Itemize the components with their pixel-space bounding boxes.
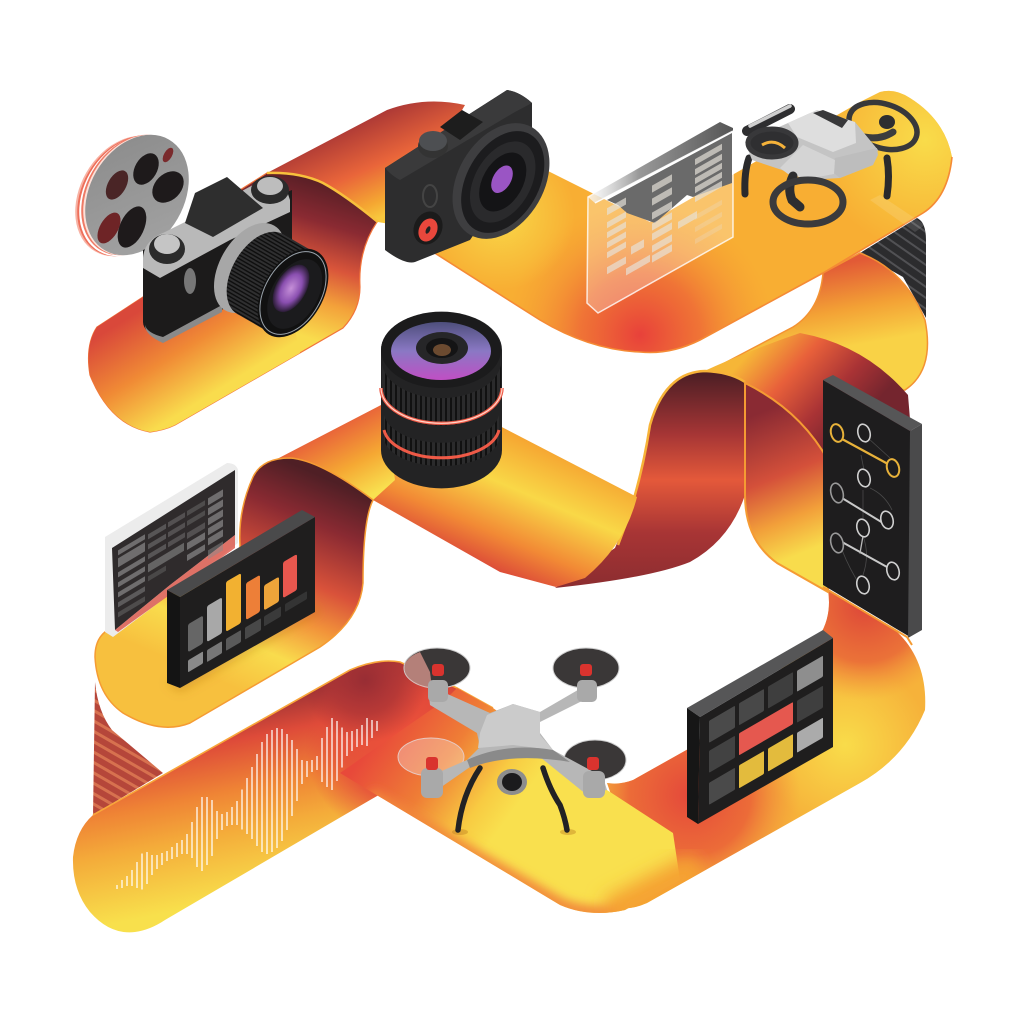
- icon: small folding drone: [745, 94, 925, 232]
- panel: dark data table: [105, 463, 238, 637]
- chart bars: [188, 534, 307, 673]
- ribbon: long band top edge: [93, 661, 493, 815]
- compact body: [385, 90, 532, 262]
- ribbon: front band under drone: [340, 688, 680, 913]
- glass top edge: [588, 122, 733, 203]
- ribbon: rounded tail end: [89, 260, 300, 432]
- film coil behind right loop: [860, 218, 926, 318]
- drone camera: [497, 769, 527, 795]
- grid side: [687, 708, 700, 824]
- ribbon: back band of fold: [700, 333, 915, 480]
- lens glass: [391, 322, 491, 380]
- panel: glass data chart: [587, 122, 733, 313]
- ribbon: blended seam at the lower bend: [610, 868, 700, 915]
- lens upper ribs: [382, 365, 501, 425]
- ribbon: main top band lower edge: [430, 157, 952, 352]
- lens red ring upper: [381, 388, 502, 423]
- lens inner core: [426, 338, 458, 358]
- icon: film reel: [54, 116, 210, 275]
- ribbon: fold edge: [618, 371, 745, 545]
- grid top: [687, 630, 833, 717]
- drone body underside: [467, 748, 570, 768]
- grid front: [698, 638, 833, 824]
- camera body: [143, 190, 292, 341]
- drone legs: [745, 158, 888, 196]
- lens red ring highlight: [381, 388, 502, 423]
- camera lens: [199, 211, 343, 350]
- rotor disc front right: [564, 740, 626, 780]
- dial knob: [149, 234, 185, 264]
- rear right rotor: [843, 94, 923, 158]
- camera prism: [185, 177, 263, 237]
- motors: [421, 680, 605, 798]
- rotor caps: [426, 664, 599, 770]
- board nodes: [829, 423, 901, 595]
- table red glow: [115, 535, 235, 632]
- camera top plate: [143, 180, 290, 278]
- slab side: [167, 590, 180, 688]
- reel holes: [93, 146, 190, 252]
- compact lens: [433, 106, 569, 256]
- icon: lens on ribbon: [381, 312, 502, 488]
- lens top rim: [381, 312, 501, 388]
- ribbon: right loop: [700, 253, 928, 480]
- glass dark header region: [607, 133, 732, 223]
- board top: [823, 375, 922, 431]
- grid cells: [709, 655, 823, 806]
- drone leg shadows: [452, 829, 576, 835]
- slab shadow: [167, 606, 320, 692]
- ribbon: fold left face: [555, 371, 745, 588]
- board connections: [842, 439, 888, 567]
- board front: [823, 380, 910, 637]
- drone frame silhouette: [421, 687, 607, 797]
- camera base strip: [145, 305, 222, 343]
- icon: SLR camera: [143, 176, 343, 350]
- left rotor ring: [748, 129, 796, 157]
- panel: grid slab: [687, 630, 833, 824]
- lens red ring lower: [384, 430, 499, 458]
- slab front: [180, 517, 315, 688]
- ribbon: upper arc over curl: [267, 101, 465, 225]
- ribbon: long band with rounded end: [73, 661, 480, 932]
- top dial: [418, 131, 448, 158]
- slab top: [167, 510, 315, 597]
- panel: node flow board: [823, 375, 922, 638]
- glass white line: [595, 131, 733, 203]
- compact top edge: [385, 90, 532, 180]
- rotor disc back left: [404, 648, 470, 688]
- front rotor ring: [773, 176, 843, 224]
- drone body backing: [745, 110, 878, 180]
- drone lower shell: [780, 145, 835, 179]
- drone legs: [458, 768, 567, 830]
- red button: [408, 207, 448, 249]
- panel: bar chart slab: [167, 510, 320, 692]
- board thin links: [842, 438, 892, 585]
- camera badge: [184, 268, 196, 294]
- board side: [908, 424, 922, 638]
- icon: compact camera: [385, 90, 569, 262]
- ribbon: fold right face: [745, 383, 828, 592]
- rotor disc front left: [398, 738, 464, 776]
- folded rear arm: [747, 106, 790, 131]
- drone sensor: [813, 110, 848, 128]
- chart: audio waveform: [117, 718, 377, 890]
- shutter knob: [251, 176, 289, 204]
- ribbon: front band lower edge glow: [370, 795, 625, 913]
- icon: quadcopter drone: [398, 648, 626, 835]
- drone upper shell: [788, 110, 856, 152]
- ribbon: curl edge: [267, 173, 378, 222]
- film coil behind lower left: [93, 682, 163, 815]
- drone rear block: [830, 148, 878, 178]
- flash box: [440, 110, 483, 140]
- rotor disc back right: [553, 648, 619, 688]
- lens lower ribs: [384, 415, 499, 466]
- drone center plate: [478, 704, 553, 750]
- table rows: [118, 487, 223, 617]
- ribbon: top tail and curl: [89, 172, 377, 432]
- glass rows: [607, 143, 722, 294]
- ribbon: lower right band: [600, 590, 925, 908]
- lens inner tube: [416, 332, 468, 364]
- side dial: [423, 185, 437, 207]
- ribbon: middle band right: [373, 395, 637, 587]
- ribbon: middle band left: [277, 403, 395, 500]
- table dark area: [112, 470, 235, 630]
- drone shadow: [870, 195, 925, 232]
- ribbon: edge over board base: [823, 587, 912, 645]
- lens barrel: [381, 312, 502, 488]
- ribbon: main top band: [430, 91, 952, 352]
- ribbon: middle panel with fold: [95, 458, 373, 727]
